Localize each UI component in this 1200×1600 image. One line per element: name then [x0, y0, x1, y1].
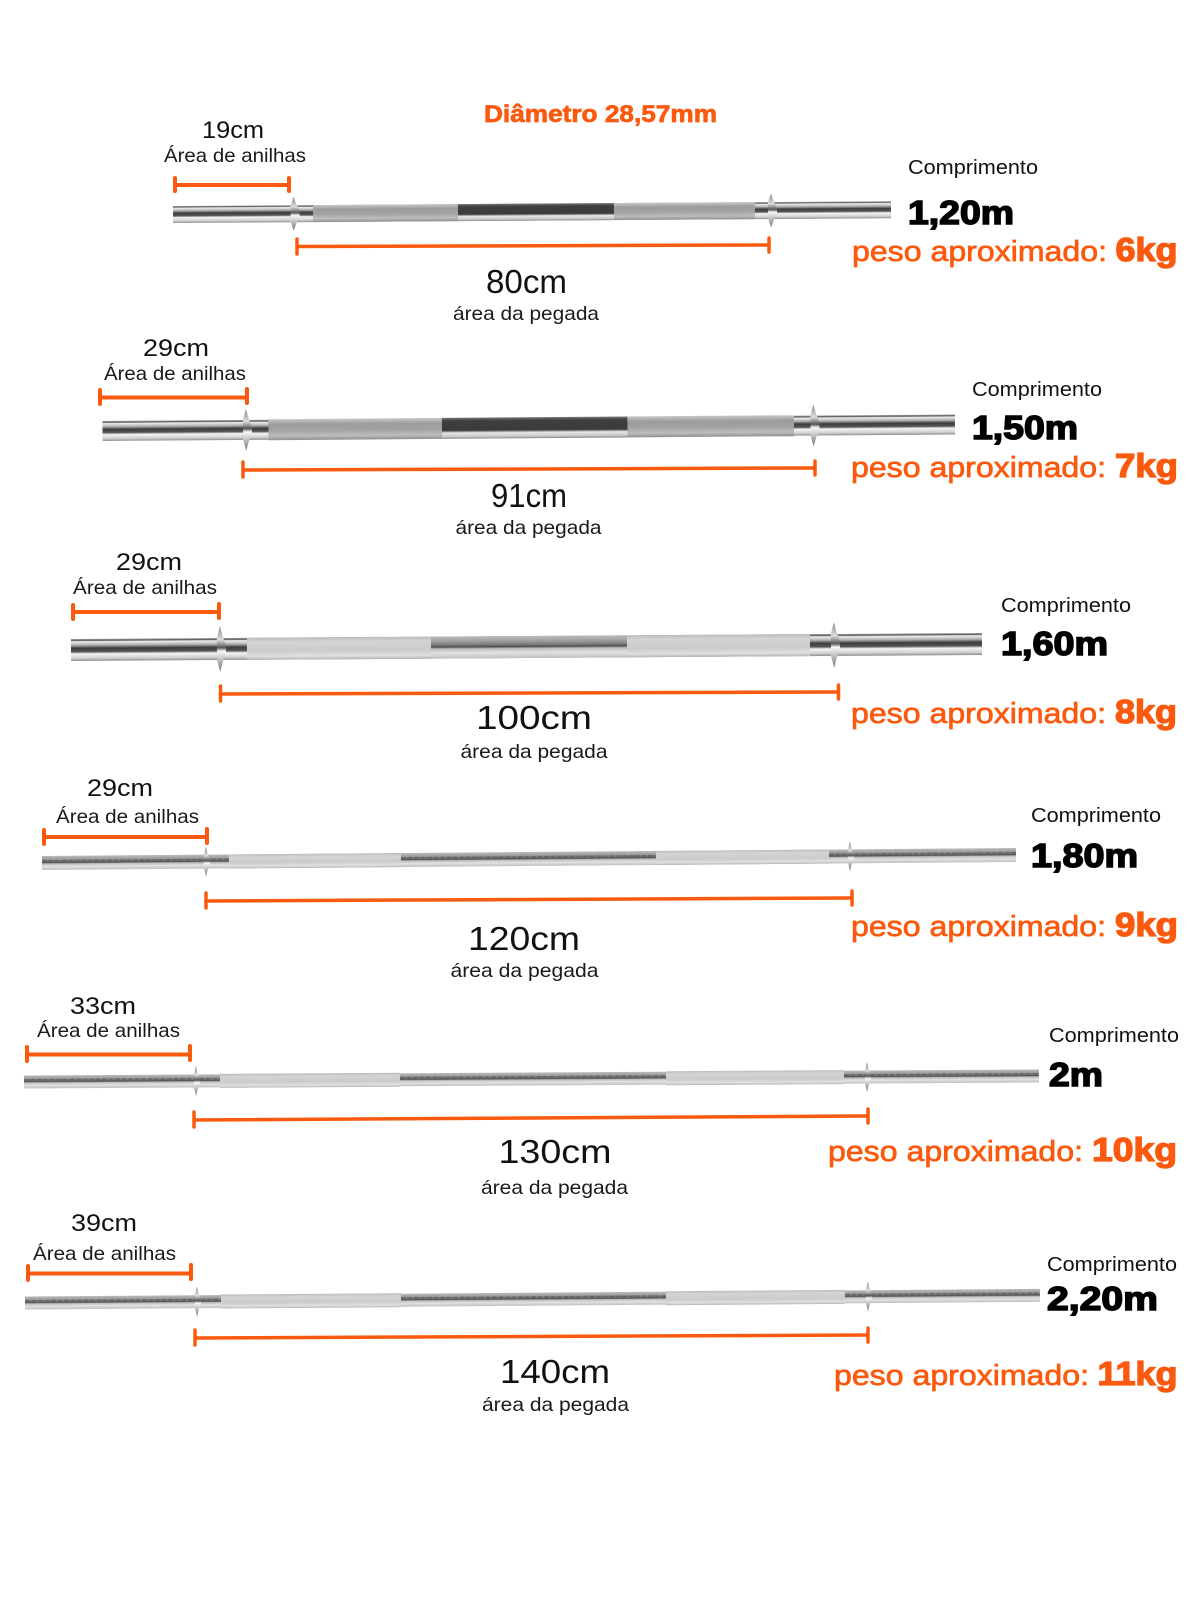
panel: bar 1,20m — [164, 117, 1178, 325]
weight value: 7kg — [1115, 447, 1178, 484]
panel: bar 1,60m — [71, 549, 1177, 763]
bracket: grip area — [195, 1328, 868, 1345]
length label: Comprimento — [1047, 1254, 1177, 1276]
bracket: grip area — [194, 1109, 868, 1127]
weight label: peso aproximado: — [828, 1136, 1083, 1168]
plate length: 19cm — [202, 117, 264, 144]
bracket: plate area — [73, 604, 219, 619]
plate label: Área de anilhas — [56, 805, 199, 828]
panel: bar 1,80m — [42, 775, 1178, 982]
weight label: peso aproximado: — [851, 698, 1106, 730]
length label: Comprimento — [908, 157, 1038, 179]
plate label: Área de anilhas — [33, 1242, 176, 1265]
bracket: grip area — [297, 238, 769, 254]
plate length: 29cm — [116, 549, 182, 576]
plate label: Área de anilhas — [37, 1019, 180, 1042]
grip length: 80cm — [486, 263, 567, 300]
bracket: plate area — [175, 178, 289, 191]
grip label: área da pegada — [460, 741, 608, 763]
length label: Comprimento — [972, 379, 1102, 401]
barbell 1,20m — [173, 193, 891, 231]
bracket: plate area — [100, 389, 247, 404]
bracket: plate area — [28, 1265, 191, 1280]
barbell 1,80m — [42, 840, 1016, 878]
bracket: grip area — [220, 685, 838, 701]
weight label: peso aproximado: — [851, 911, 1106, 943]
barbell 1,60m — [71, 621, 982, 673]
barbell 1,50m — [102, 403, 955, 452]
length value: 1,60m — [1001, 625, 1108, 662]
title: diameter: Diâmetro 28,57mm — [484, 101, 717, 128]
panel: bar 2m — [24, 993, 1179, 1199]
panel: bar 2,20m — [25, 1210, 1177, 1416]
plate label: Área de anilhas — [73, 576, 217, 599]
plate label: Área de anilhas — [164, 144, 306, 167]
length value: 2m — [1049, 1056, 1103, 1093]
weight label: peso aproximado: — [834, 1360, 1089, 1392]
length value: 1,50m — [972, 409, 1078, 446]
weight value: 6kg — [1116, 231, 1178, 268]
grip length: 120cm — [468, 920, 580, 957]
weight value: 11kg — [1098, 1355, 1178, 1392]
weight label: peso aproximado: — [852, 236, 1107, 268]
grip label: área da pegada — [481, 1177, 628, 1199]
grip label: área da pegada — [456, 517, 602, 539]
plate length: 29cm — [87, 775, 153, 802]
length value: 1,80m — [1031, 837, 1138, 874]
panel: bar 1,50m — [100, 335, 1178, 539]
length label: Comprimento — [1031, 805, 1161, 827]
weight value: 10kg — [1092, 1131, 1177, 1168]
length label: Comprimento — [1001, 595, 1131, 617]
grip length: 100cm — [476, 699, 592, 736]
grip length: 130cm — [498, 1133, 612, 1170]
plate length: 29cm — [143, 335, 209, 362]
barbell 2,20m — [25, 1280, 1040, 1318]
bracket: plate area — [27, 1046, 190, 1061]
barbell 2m — [24, 1061, 1039, 1097]
plate label: Área de anilhas — [104, 362, 246, 385]
weight label: peso aproximado: — [851, 452, 1106, 484]
grip label: área da pegada — [453, 303, 599, 325]
grip label: área da pegada — [450, 960, 599, 982]
bracket: grip area — [243, 461, 815, 477]
bracket: grip area — [206, 891, 852, 908]
length value: 1,20m — [908, 194, 1014, 231]
length label: Comprimento — [1049, 1025, 1179, 1047]
weight value: 9kg — [1115, 906, 1178, 943]
weight value: 8kg — [1115, 693, 1177, 730]
grip length: 140cm — [500, 1353, 610, 1390]
bracket: plate area — [44, 829, 207, 844]
plate length: 33cm — [70, 993, 136, 1020]
grip label: área da pegada — [482, 1394, 629, 1416]
plate length: 39cm — [71, 1210, 137, 1237]
grip length: 91cm — [491, 477, 567, 514]
length value: 2,20m — [1047, 1280, 1158, 1317]
